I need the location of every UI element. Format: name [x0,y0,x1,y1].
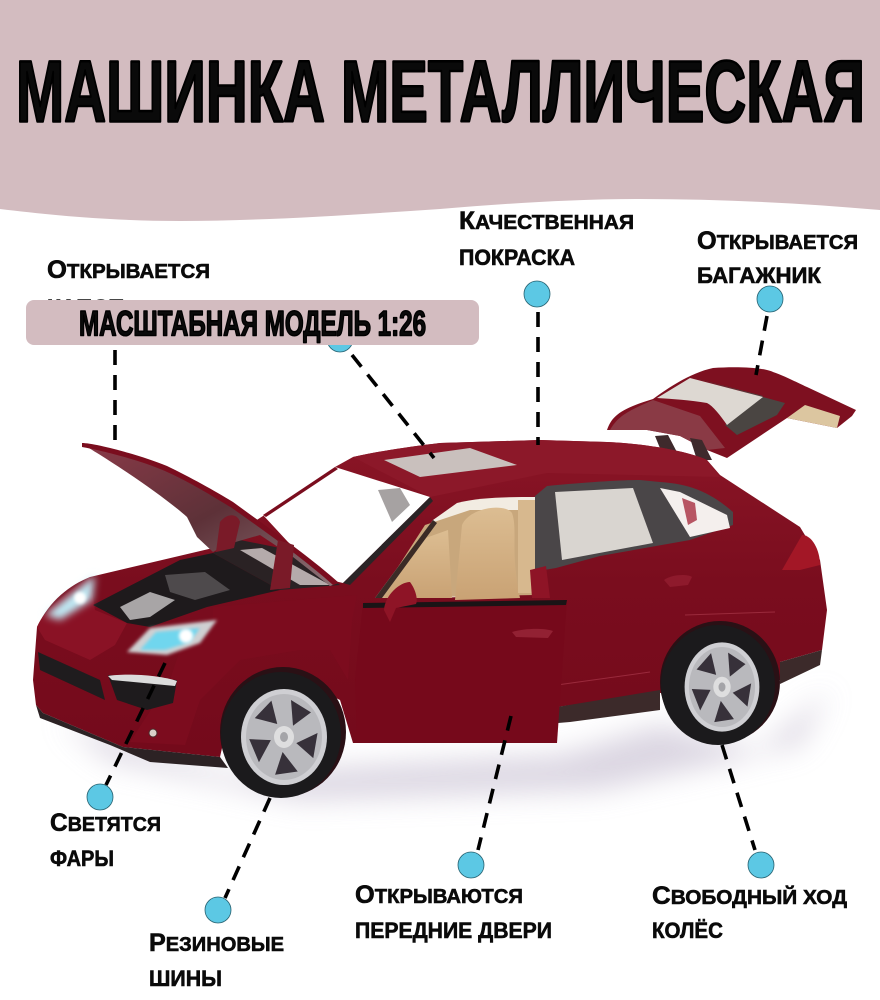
label: hood opens: КАПОТ [47,295,124,320]
label: free-spinning wheels: КОЛЁС [652,918,723,943]
label: hood opens: ОТКРЫВАЕТСЯ [47,256,210,284]
header band [0,0,880,221]
sunroof [384,448,517,477]
label: free-spinning wheels [652,882,847,943]
leader: hood [113,350,117,446]
marker: headlights [87,784,113,810]
fog intake [108,675,177,710]
front wheel [221,672,341,798]
left headlight glow [45,575,95,620]
label: trunk opens [697,227,858,288]
leader: trunk [756,316,767,375]
front fender crease [130,595,357,745]
marker: wheels [748,852,774,878]
rear handle [664,575,692,587]
tailgate [607,367,856,460]
headlight [127,620,217,655]
label: headlights glow: СВЕТЯТСЯ [50,809,161,837]
front lower lip [36,705,228,768]
leader: tyres [225,798,270,898]
label: hood opens [47,256,210,320]
roof sheen [353,440,720,497]
car [33,367,856,798]
taillight [782,535,820,570]
open hood [82,443,339,590]
leader: headlights [106,663,165,785]
banner: scale model: МАСШТАБНАЯ МОДЕЛЬ 1:26 [79,304,426,344]
chrome strip [108,675,177,686]
label: rubber tyres: ШИНЫ [149,966,222,991]
leader: wheels [722,745,755,850]
label: quality paint: КАЧЕСТВЕННАЯ [459,207,634,235]
car shadow [60,690,830,800]
label: headlights glow: ФАРЫ [50,846,114,871]
engine bay [93,540,340,627]
label: front doors open: ПЕРЕДНИЕ ДВЕРИ [355,918,552,943]
marker: sunroof dot [327,326,353,352]
rear side window [555,488,653,560]
character line [557,612,775,685]
side opening interior [375,497,535,600]
label: rubber tyres: РЕЗИНОВЫЕ [149,929,284,957]
fog lamp [149,729,157,737]
lower trim [557,650,822,723]
label: quality paint: ПОКРАСКА [459,245,575,270]
marker: trunk [757,286,783,312]
label: front doors open: ОТКРЫВАЮТСЯ [355,881,523,909]
bonnet front panel [37,577,127,660]
marker: tyres [205,897,231,923]
marker: paint [524,281,550,307]
label: trunk opens: ОТКРЫВАЕТСЯ [697,227,858,255]
banner: scale model [26,300,479,345]
front grille [38,652,105,700]
marker: doors [458,852,484,878]
body [33,440,827,757]
wheel arch rear [660,621,780,743]
quarter window [660,488,730,537]
window frames [535,480,733,595]
label: headlights glow [50,809,161,871]
label: quality paint [459,207,634,270]
pillar [530,566,550,598]
leader: paint [536,312,540,445]
label: free-spinning wheels: СВОБОДНЫЙ ХОД [652,882,847,910]
label: trunk opens: БАГАЖНИК [697,263,822,288]
mirror [384,582,417,622]
leader: sunroof [352,355,434,458]
door [355,600,567,743]
wheel arch front [220,667,346,797]
label: rubber tyres [149,929,284,991]
rear wheel [661,625,775,745]
label: front doors open [355,881,552,943]
windshield [263,467,430,583]
leader: doors [478,716,511,850]
door handle [512,629,553,638]
